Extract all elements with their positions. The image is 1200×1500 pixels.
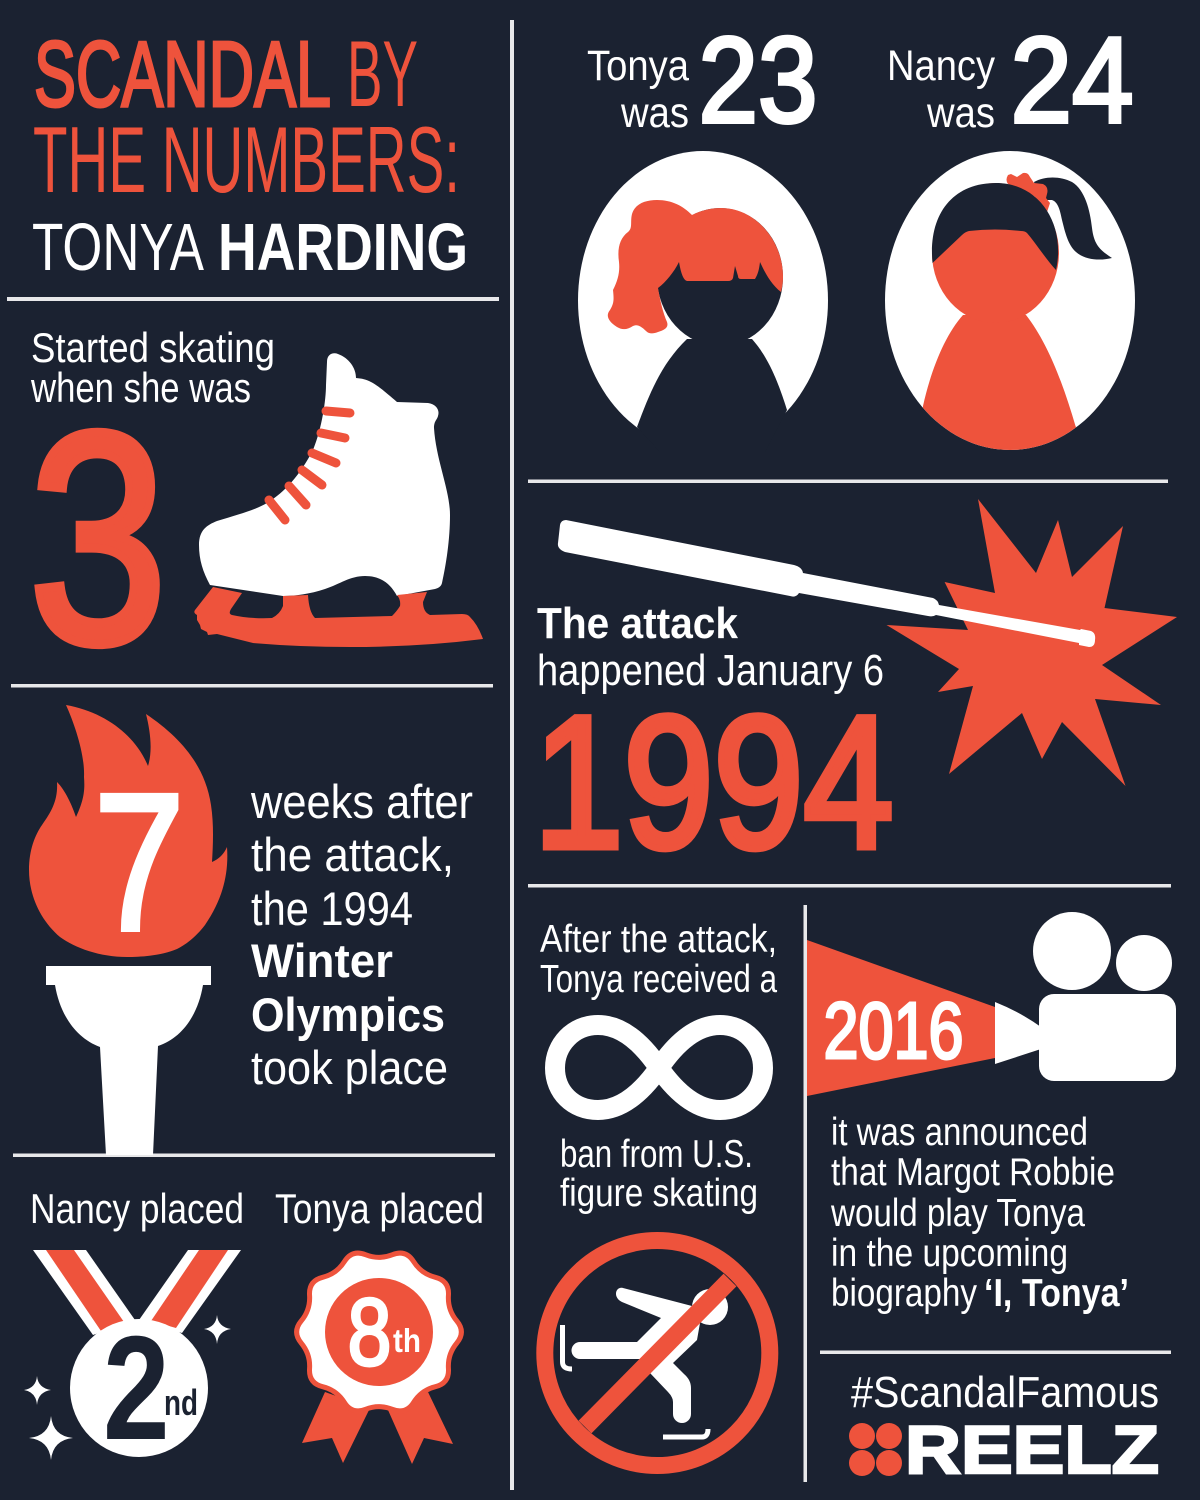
text: after the attack: After the attack, xyxy=(540,918,777,961)
text: tonya was 23: was xyxy=(620,89,689,137)
text: ban from figure skating: ban from U.S. xyxy=(560,1133,753,1176)
text: margot robbie announcement xyxy=(830,1111,1129,1315)
text: started skating: Started skating xyxy=(31,324,275,371)
icon: tonya portrait xyxy=(578,151,828,452)
text: tonya placed: Tonya placed xyxy=(275,1185,484,1232)
text: margot robbie announcement: that Margot Robbie xyxy=(831,1151,1115,1194)
title: THE NUMBERS: xyxy=(33,107,460,212)
icon: projector beam with 2016 xyxy=(807,940,995,1096)
number: 1994: 1994 xyxy=(534,677,894,887)
text: margot robbie announcement: in the upcoming xyxy=(831,1232,1068,1275)
text: nancy placed: Nancy placed xyxy=(30,1185,244,1232)
text: tonya was 23: 23 xyxy=(698,12,818,148)
text: the attack date: happened January 6 xyxy=(537,646,884,695)
text: ban from figure skating: figure skating xyxy=(560,1172,758,1215)
text: after the attack: Tonya received a xyxy=(540,958,777,1001)
icon: projector beam with 2016: 2016 xyxy=(824,986,964,1075)
icon: starburst xyxy=(886,499,1177,786)
icon: baton xyxy=(558,520,1095,647)
icon: no skating sign xyxy=(545,1240,770,1466)
text: tonya was 23: Tonya xyxy=(587,42,689,90)
text: nancy was 24: was xyxy=(926,89,995,137)
text: started skating: when she was xyxy=(30,364,251,411)
text: started skating xyxy=(30,324,275,411)
text: after the attack xyxy=(540,918,777,1001)
text: nancy was 24: Nancy xyxy=(887,42,995,90)
icon: nancy portrait xyxy=(885,151,1135,460)
text: nancy was 24: 24 xyxy=(1010,12,1134,148)
text: the attack date: The attack xyxy=(537,599,738,648)
title: BY xyxy=(347,21,418,126)
icon: infinity symbol xyxy=(555,1025,763,1110)
text: margot robbie announcement: biography xyxy=(831,1272,977,1315)
icon: second place medal xyxy=(24,1250,241,1471)
text: tonya was 23 xyxy=(587,12,818,148)
icon: eighth place rosette: th xyxy=(393,1322,421,1359)
text: weeks after the attack: took place xyxy=(251,1041,448,1094)
text: nancy was 24 xyxy=(887,12,1134,148)
text: weeks after the attack: the attack, xyxy=(251,828,454,881)
text: hashtag: #ScandalFamous xyxy=(851,1368,1159,1417)
icon: second place medal: nd xyxy=(164,1382,198,1423)
text: weeks after the attack xyxy=(250,775,473,1094)
icon: movie camera xyxy=(995,912,1176,1081)
text: margot robbie announcement: would play Tonya xyxy=(830,1192,1085,1235)
text: weeks after the attack: Winter xyxy=(251,934,393,987)
text: weeks after the attack: Olympics xyxy=(251,988,445,1041)
text: weeks after the attack: weeks after xyxy=(250,775,473,828)
title: HARDING xyxy=(218,210,468,285)
text: weeks after the attack: the 1994 xyxy=(251,882,413,935)
icon: olympic torch with flame xyxy=(29,705,227,1155)
text: margot robbie announcement: ‘I, Tonya’ xyxy=(984,1272,1129,1315)
title: TONYA xyxy=(32,210,204,285)
text: the attack date xyxy=(537,599,884,695)
icon: eighth place rosette xyxy=(297,1253,461,1464)
icon: second place medal: 2 xyxy=(103,1306,170,1471)
title xyxy=(32,21,468,285)
icon: eighth place rosette: 8 xyxy=(348,1279,392,1386)
icon: ice skate xyxy=(194,353,483,647)
text: ban from figure skating xyxy=(560,1133,758,1215)
icon: olympic torch with flame: 7 xyxy=(94,754,184,972)
title: SCANDAL xyxy=(34,22,331,126)
number: 3: 3 xyxy=(29,370,167,706)
logo: reelz: REELZ xyxy=(905,1412,1159,1488)
text: margot robbie announcement: it was announced xyxy=(831,1111,1088,1154)
